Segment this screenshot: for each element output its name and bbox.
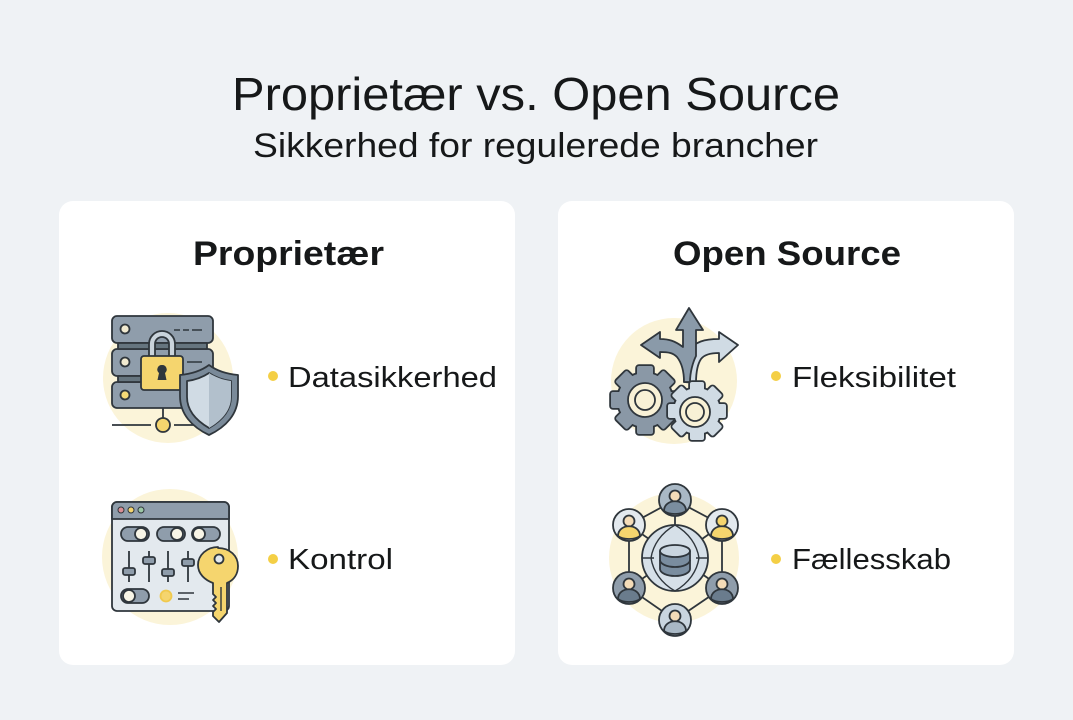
bullet	[268, 371, 278, 381]
icon: control window and key	[102, 489, 238, 625]
subtitle: Sikkerhed for regulerede brancher	[253, 127, 818, 165]
person: upper right	[706, 509, 738, 541]
bullet	[771, 554, 781, 564]
label: Fleksibilitet: Fleksibilitet	[792, 362, 956, 394]
person: bottom	[659, 604, 691, 636]
label: Kontrol: Kontrol	[288, 544, 393, 576]
panel: Proprietær	[59, 201, 515, 665]
label: Datasikkerhed: Datasikkerhed	[288, 362, 497, 394]
heading: Proprietær: Proprietær	[193, 235, 384, 273]
small gear	[668, 382, 726, 440]
person: lower right	[706, 572, 738, 604]
bullet	[268, 554, 278, 564]
person: top	[659, 484, 691, 516]
large gear	[611, 366, 679, 434]
person: upper left	[613, 509, 645, 541]
person: lower left	[613, 572, 645, 604]
panel: Open Source	[558, 201, 1014, 665]
label: Fællesskab: Fællesskab	[792, 544, 951, 576]
icon: server, lock and shield	[103, 313, 238, 443]
bullet	[771, 371, 781, 381]
title: Proprietær vs. Open Source	[232, 68, 840, 120]
icon: community network	[609, 484, 739, 636]
heading: Open Source: Open Source	[673, 235, 901, 273]
icon: gears and branching arrows	[611, 308, 738, 444]
